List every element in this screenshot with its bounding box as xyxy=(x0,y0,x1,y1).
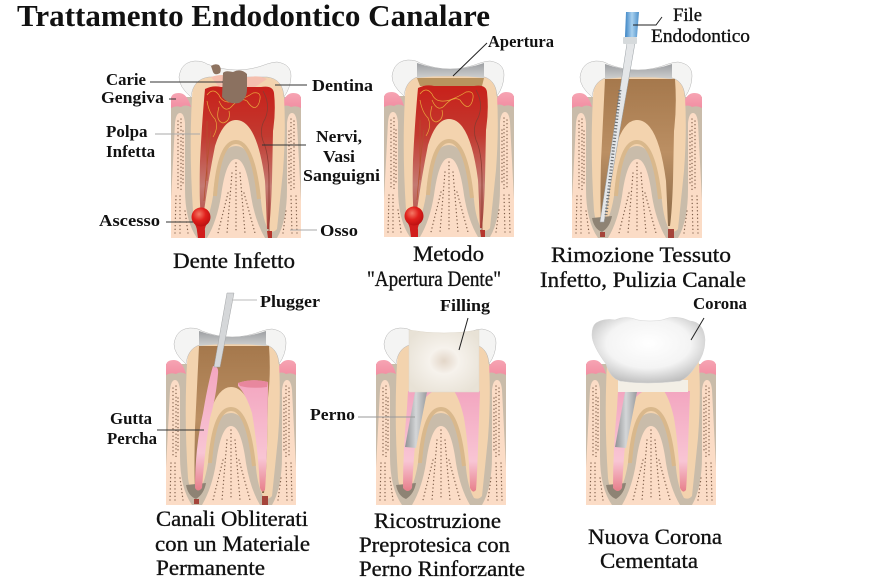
leader line: Apertura xyxy=(453,43,487,76)
leader line: Corona xyxy=(691,318,704,340)
caption: Dente Infetto: Dente Infetto xyxy=(173,248,295,273)
leader line: Perno xyxy=(358,416,415,418)
leader line: Filling xyxy=(459,318,468,350)
caption: Canali Obliterati: con un Materiale xyxy=(155,531,310,556)
caption: Rimozione Tessuto: Rimozione Tessuto xyxy=(551,242,731,267)
label: Nervi, Vasi Sanguigni: Sanguigni xyxy=(303,166,380,185)
leader line: Plugger xyxy=(232,299,257,301)
label: Perno: Perno xyxy=(310,405,355,424)
leader lines xyxy=(150,82,307,222)
label: File Endodontico: Endodontico xyxy=(651,26,750,47)
label: Nervi, Vasi Sanguigni: Vasi xyxy=(323,147,355,166)
light leader lines xyxy=(155,134,317,230)
label: Corona: Corona xyxy=(693,294,747,313)
label: Ascesso: Ascesso xyxy=(99,211,160,230)
label: Gutta Percha: Gutta xyxy=(110,409,152,428)
caption: Ricostruzione: Ricostruzione xyxy=(374,508,501,533)
panel: rimozione tessuto xyxy=(540,5,750,292)
icon: crown xyxy=(592,317,705,383)
label: Carie: Carie xyxy=(106,70,146,89)
label: Gutta Percha: Percha xyxy=(107,429,157,448)
label: Polpa Infetta: Polpa xyxy=(106,122,148,141)
caption: Canali Obliterati: Canali Obliterati xyxy=(156,506,308,531)
leader line: Gutta Percha xyxy=(157,429,204,431)
label: Apertura: Apertura xyxy=(488,32,554,51)
label: Gengiva: Gengiva xyxy=(101,88,165,107)
tooth illustration: cleaning with file xyxy=(572,61,702,238)
panel: canali obliterati xyxy=(107,292,320,580)
caption: Nuova Corona Cementata: Cementata xyxy=(600,548,698,573)
panel: metodo apertura dente xyxy=(367,32,554,291)
caption: Rimozione Tessuto: Infetto, Pulizia Canale xyxy=(540,267,746,292)
label: File Endodontico: File xyxy=(673,5,702,26)
tooth illustration: opened crown xyxy=(384,60,514,237)
caption: Ricostruzione: Preprotesica con xyxy=(359,532,510,557)
tooth illustration: gutta percha xyxy=(166,328,296,505)
caption: Metodo Apertura Dente: "Apertura Dente" xyxy=(367,266,501,291)
caption: Metodo Apertura Dente: Metodo xyxy=(413,241,484,266)
panel: ricostruzione preprotesica xyxy=(310,296,525,580)
icon: endodontic file xyxy=(600,12,639,222)
label: Polpa Infetta: Infetta xyxy=(106,142,156,161)
tooth illustration: infected tooth xyxy=(171,61,301,238)
tooth illustration: post and filling xyxy=(376,328,506,505)
label: Osso: Osso xyxy=(320,221,358,240)
label: Plugger: Plugger xyxy=(260,292,320,311)
caption: Nuova Corona Cementata: Nuova Corona xyxy=(588,524,722,549)
caption: Canali Obliterati: Permanente xyxy=(156,555,265,580)
tooth illustration: cemented crown xyxy=(586,344,716,505)
panel: dente infetto xyxy=(99,61,380,273)
icon: plugger xyxy=(214,293,234,367)
label: Nervi, Vasi Sanguigni: Nervi, xyxy=(316,127,362,146)
label: Dentina: Dentina xyxy=(312,76,374,95)
label: Filling: Filling xyxy=(440,296,491,315)
panel: nuova corona xyxy=(586,294,747,573)
leader line: File xyxy=(633,17,662,25)
